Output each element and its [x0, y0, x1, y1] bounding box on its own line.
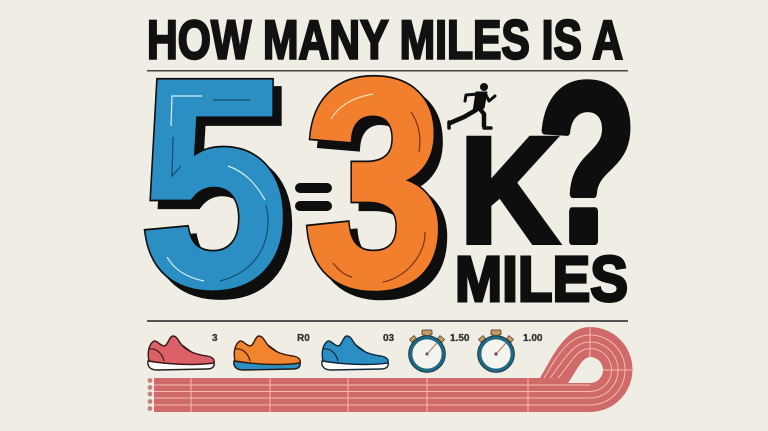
icon: blue shoe [322, 336, 388, 370]
digit three: 3 [313, 28, 452, 354]
title: HOW MANY MILES IS A [147, 8, 623, 70]
digit three: 3 [305, 20, 444, 346]
shoe label: 03 [383, 333, 395, 344]
shoe label: R0 [297, 333, 310, 344]
equals sign [295, 183, 332, 211]
question mark: ? [537, 36, 637, 289]
stopwatch label: 1.00 [523, 333, 543, 344]
icon: stopwatch [409, 330, 445, 372]
icon: orange shoe [234, 336, 300, 370]
digit three: 3 [305, 20, 444, 346]
digit five: 5 [141, 20, 287, 346]
letter K: K [460, 106, 558, 274]
digit five: 5 [141, 20, 287, 346]
running track [148, 327, 632, 412]
icon: red shoe [148, 336, 214, 370]
icon: stopwatch [478, 330, 514, 372]
digit five: 5 [149, 28, 295, 354]
shoe label: 3 [212, 333, 218, 344]
icon: runner [449, 83, 495, 128]
stopwatch label: 1.50 [450, 333, 470, 344]
miles label: MILES [455, 243, 628, 315]
